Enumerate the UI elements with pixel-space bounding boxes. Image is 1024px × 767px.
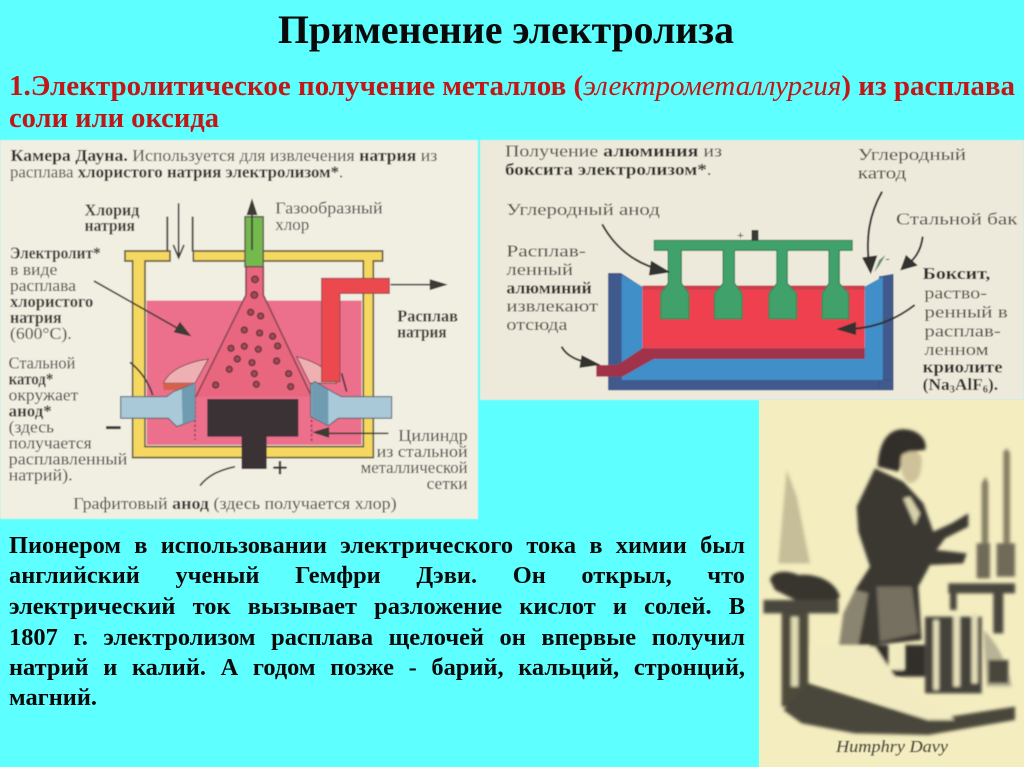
diagram labels: Хлорид (85, 201, 140, 220)
portrait: Humphry Davy engraving (759, 400, 1024, 767)
subtitle: соли или оксида (9, 102, 219, 134)
body text block: электрический ток вызывает разложение кислот и солей. В (9, 593, 745, 620)
diagram labels: окружает (9, 385, 79, 404)
funnel with bubbles (195, 267, 312, 442)
diagram labels: металлической (361, 458, 468, 477)
cathode dome (163, 357, 337, 390)
panel: aluminium electrolysis diagram (480, 140, 1024, 400)
body text block (9, 532, 745, 711)
floor shading (783, 683, 1015, 735)
molten aluminium (596, 348, 865, 377)
diagram labels: в виде (10, 260, 57, 279)
diagram labels: (здесь (9, 417, 54, 436)
panel heading: Downs cell: расплава хлористого натрия электролизом*. (10, 163, 343, 182)
title: Применение электролиза (278, 7, 734, 52)
diagram labels: Электролит* (10, 243, 101, 262)
diagram labels: Цилиндр (398, 426, 468, 445)
diagram labels: 3 (950, 385, 955, 396)
diagram labels: из стальной (377, 442, 468, 461)
diagram labels: ленный (506, 260, 573, 279)
candles and apparatus (925, 448, 1015, 693)
diagram labels: Боксит, (923, 264, 990, 283)
diagram labels: Углеродный (858, 145, 966, 164)
diagram labels: Стальной (9, 353, 75, 372)
terminal marks (737, 228, 890, 272)
diagram labels: ). (988, 375, 998, 394)
diagram labels: алюминий (506, 279, 592, 297)
body text block: английский ученый Гемфри Дэви. Он открыл, что (9, 562, 745, 589)
diagram labels: натрия (85, 216, 135, 235)
steel cathode blocks (121, 382, 392, 427)
diagram labels: расплава (10, 276, 77, 295)
diagram labels: раство- (924, 284, 987, 302)
diagram labels: натрий). (9, 465, 73, 484)
diagram labels: (600°С). (10, 324, 72, 343)
signature: Humphry Davy (835, 737, 948, 756)
diagram labels (9, 198, 468, 513)
diagram labels: расплавленный (9, 449, 127, 468)
subtitle (9, 70, 1015, 134)
red sodium tube (322, 278, 389, 382)
terminal marks: + (737, 228, 744, 242)
diagram labels: 6 (983, 385, 988, 396)
body text block: Пионером в использовании электрического тока в химии был (9, 532, 745, 559)
body text block: магний. (9, 684, 97, 711)
diagram labels: хлор (275, 215, 309, 234)
diagram labels: Углеродный анод (506, 200, 660, 219)
arrows (94, 201, 445, 486)
panel heading: Downs cell (10, 146, 438, 182)
diagram labels: Получение алюминия из (505, 142, 722, 161)
panel heading: Downs cell: Камера Дауна. Используется для извлечения натрия из (11, 146, 438, 165)
diagram labels: криолите (923, 358, 1003, 376)
diagram labels: натрия (10, 308, 62, 327)
diagram labels: получается (9, 433, 92, 452)
diagram labels: боксита электролизом* . (505, 160, 712, 179)
dark tank shell (608, 273, 893, 390)
diagram labels: катод (858, 164, 907, 182)
diagram labels: ренный в (924, 303, 1008, 322)
diagram labels: хлористого (10, 292, 93, 311)
green anodes (654, 240, 852, 319)
diagram labels: Расплав- (506, 242, 586, 261)
diagram labels: (Na (923, 375, 950, 394)
body text block: 1807 г. электролизом расплава щелочей он впервые получил (9, 624, 745, 651)
green chlorine neck (245, 217, 263, 267)
diagram labels: Расплав (397, 307, 458, 326)
diagram labels: Стальной бак (896, 210, 1018, 228)
graphite anode (207, 399, 298, 469)
diagram labels: отсюда (506, 315, 568, 334)
arrows (562, 192, 923, 367)
diagram labels: извлекают (506, 297, 599, 316)
body text block: натрий и калий. А годом позже - барий, кальций, стронций, (9, 654, 745, 681)
diagram labels: сетки (427, 474, 468, 493)
blue tank lining (622, 275, 883, 380)
terminal marks: - (886, 252, 890, 265)
diagram labels: Графитовый анод (здесь получается хлор) (73, 494, 397, 513)
figure of Davy (839, 429, 968, 677)
diagram labels: катод* (9, 369, 53, 388)
diagram labels: натрия (397, 323, 447, 342)
subtitle: 1.Электролитическое получение металлов (электрометаллургия) из расплава (9, 70, 1015, 102)
diagram labels: AlF (955, 375, 983, 394)
diagram labels: расплав- (924, 322, 1001, 341)
panel: Downs cell diagram (0, 140, 478, 519)
diagram labels: Газообразный (275, 198, 383, 217)
diagram labels (505, 142, 1018, 396)
molten electrolyte (147, 301, 362, 445)
yellow vessel (125, 217, 383, 458)
diagram labels: анод* (9, 401, 52, 420)
red electrolyte (642, 286, 865, 348)
diagram labels: ленном (924, 340, 989, 359)
left table with retort (763, 470, 840, 707)
